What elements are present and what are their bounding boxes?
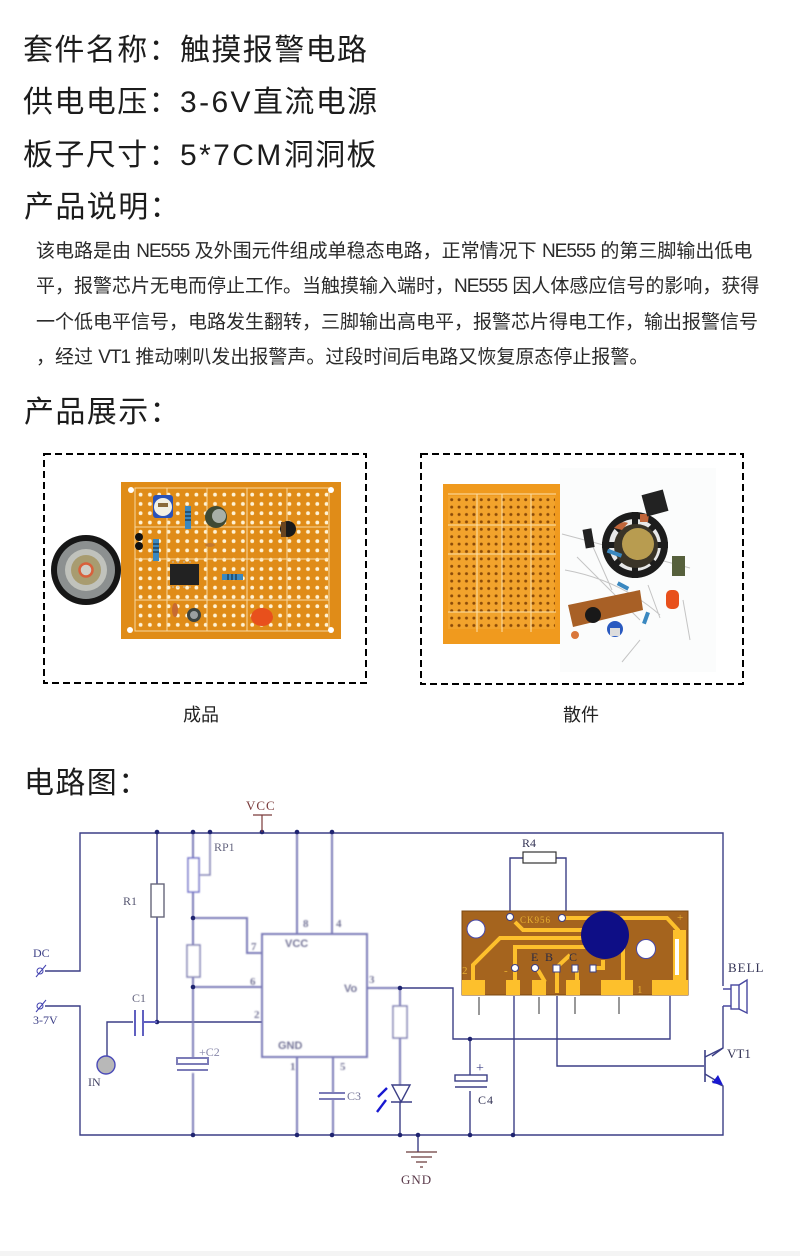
vcc symbol: VCC — [246, 798, 276, 813]
caption: finished: 成品 — [183, 705, 219, 725]
heading: product display: 产品展示： — [24, 396, 181, 429]
jumper header — [135, 533, 143, 550]
alarm module pcb: CK956 — [520, 915, 551, 925]
speaker bell: BELL — [728, 960, 764, 975]
ne555 section (soft): 6 — [250, 976, 256, 988]
ne555 section (soft): VCC — [285, 938, 308, 950]
main wiring — [45, 833, 723, 1152]
alarm module pcb: 2 — [462, 965, 468, 977]
circuit diagram — [33, 798, 764, 1187]
alarm module pcb: - — [504, 965, 508, 977]
ne555 section (soft): 5 — [340, 1061, 346, 1073]
speaker bell — [723, 960, 764, 1013]
ne555 section (soft): Vo — [344, 983, 358, 995]
loose speaker — [602, 512, 668, 578]
ne555 section (soft): 3 — [369, 974, 375, 986]
capacitor c1: C1 — [132, 991, 146, 1005]
resistor r1 — [123, 884, 164, 917]
caption: parts: 散件 — [563, 705, 599, 725]
terminal 3-7v: 3-7V — [33, 1013, 58, 1027]
junction dots — [155, 830, 515, 1137]
ne555 section (soft): 7 — [251, 941, 257, 953]
transistor vt1: VT1 — [727, 1046, 751, 1061]
heading: circuit diagram: 电路图： — [24, 767, 150, 800]
label rp1: RP1 — [214, 840, 235, 854]
led — [251, 608, 273, 626]
pcb board — [121, 482, 341, 639]
loose electrolytic capacitors — [582, 528, 685, 576]
capacitor c2 — [177, 1045, 220, 1070]
ne555 section (soft): 8 — [303, 918, 309, 930]
trimmer — [153, 495, 173, 518]
resistors — [153, 506, 243, 580]
vcc symbol — [246, 798, 276, 832]
resistor r1: R1 — [123, 894, 137, 908]
capacitor c4: + — [476, 1061, 484, 1076]
alarm module pcb: E — [531, 950, 538, 964]
resistor r4 — [522, 836, 556, 863]
bare pcb — [443, 484, 560, 644]
alarm module pcb — [462, 911, 688, 996]
led symbol — [377, 1085, 412, 1112]
capacitor c2: +C2 — [199, 1045, 220, 1059]
touch input in — [88, 1056, 115, 1089]
transistor vt1 — [705, 1046, 751, 1085]
capacitor c1 — [132, 991, 157, 1036]
photo panel: loose parts — [420, 453, 744, 685]
loose trimmer — [607, 621, 623, 637]
alarm module pcb: 1 — [637, 984, 642, 996]
ic chip — [170, 561, 199, 588]
heading: supply voltage: 供电电压：3-6V直流电源 — [23, 86, 379, 119]
heading: product description: 产品说明： — [24, 191, 181, 224]
terminal dc — [33, 946, 50, 977]
ground gnd — [401, 1152, 437, 1187]
ground gnd: GND — [401, 1172, 432, 1187]
ne555 section (soft): 1 — [290, 1061, 296, 1073]
alarm module pcb: C — [569, 950, 577, 964]
small capacitor — [187, 608, 201, 622]
loose ceramic capacitor — [571, 631, 579, 639]
heading: kit name: 套件名称：触摸报警电路 — [23, 34, 368, 67]
text block: description: 该电路是由 NE555 及外围元件组成单稳态电路，正常情况下 NE555 的第三脚输出低电 — [36, 241, 752, 262]
text block: description — [36, 241, 759, 368]
loose resistors — [607, 549, 650, 624]
ne555 section (soft) — [187, 833, 407, 1135]
heading: board size: 板子尺寸：5*7CM洞洞板 — [23, 139, 378, 172]
photo panel: finished product — [43, 453, 367, 684]
ne555 section (soft): 2 — [254, 1009, 260, 1021]
loose ic — [642, 490, 668, 516]
capacitor c4: C4 — [478, 1093, 494, 1107]
ne555 section (soft): 4 — [336, 918, 342, 930]
alarm chip board — [568, 590, 643, 627]
capacitor c3 — [319, 1089, 361, 1103]
alarm module pcb: B — [545, 950, 553, 964]
text block: description: ，经过 VT1 推动喇叭发出报警声。过段时间后电路又恢复原态停止报警。 — [36, 347, 648, 368]
touch input in: IN — [88, 1075, 101, 1089]
capacitor — [205, 506, 227, 528]
text block: description: 平，报警芯片无电而停止工作。当触摸输入端时，NE555 因人体感应信号的影响，获得 — [36, 276, 759, 297]
loose led — [666, 590, 679, 609]
bottom edge line — [0, 1251, 800, 1256]
resistor r4: R4 — [522, 836, 536, 850]
speaker — [51, 535, 121, 605]
alarm module pcb: + — [677, 912, 683, 924]
leads — [562, 534, 690, 662]
capacitor c4 — [455, 1061, 494, 1107]
capacitor c3: C3 — [347, 1089, 361, 1103]
text block: description: 一个低电平信号，电路发生翻转，三脚输出高电平，报警芯片得电工作，输出报警信号 — [36, 312, 758, 333]
ne555 section (soft): GND — [278, 1040, 302, 1052]
module pins — [479, 997, 619, 1015]
terminal 3-7v — [33, 1000, 58, 1027]
ceramic capacitors — [172, 543, 215, 617]
transistor — [280, 521, 296, 537]
terminal dc: DC — [33, 946, 50, 960]
